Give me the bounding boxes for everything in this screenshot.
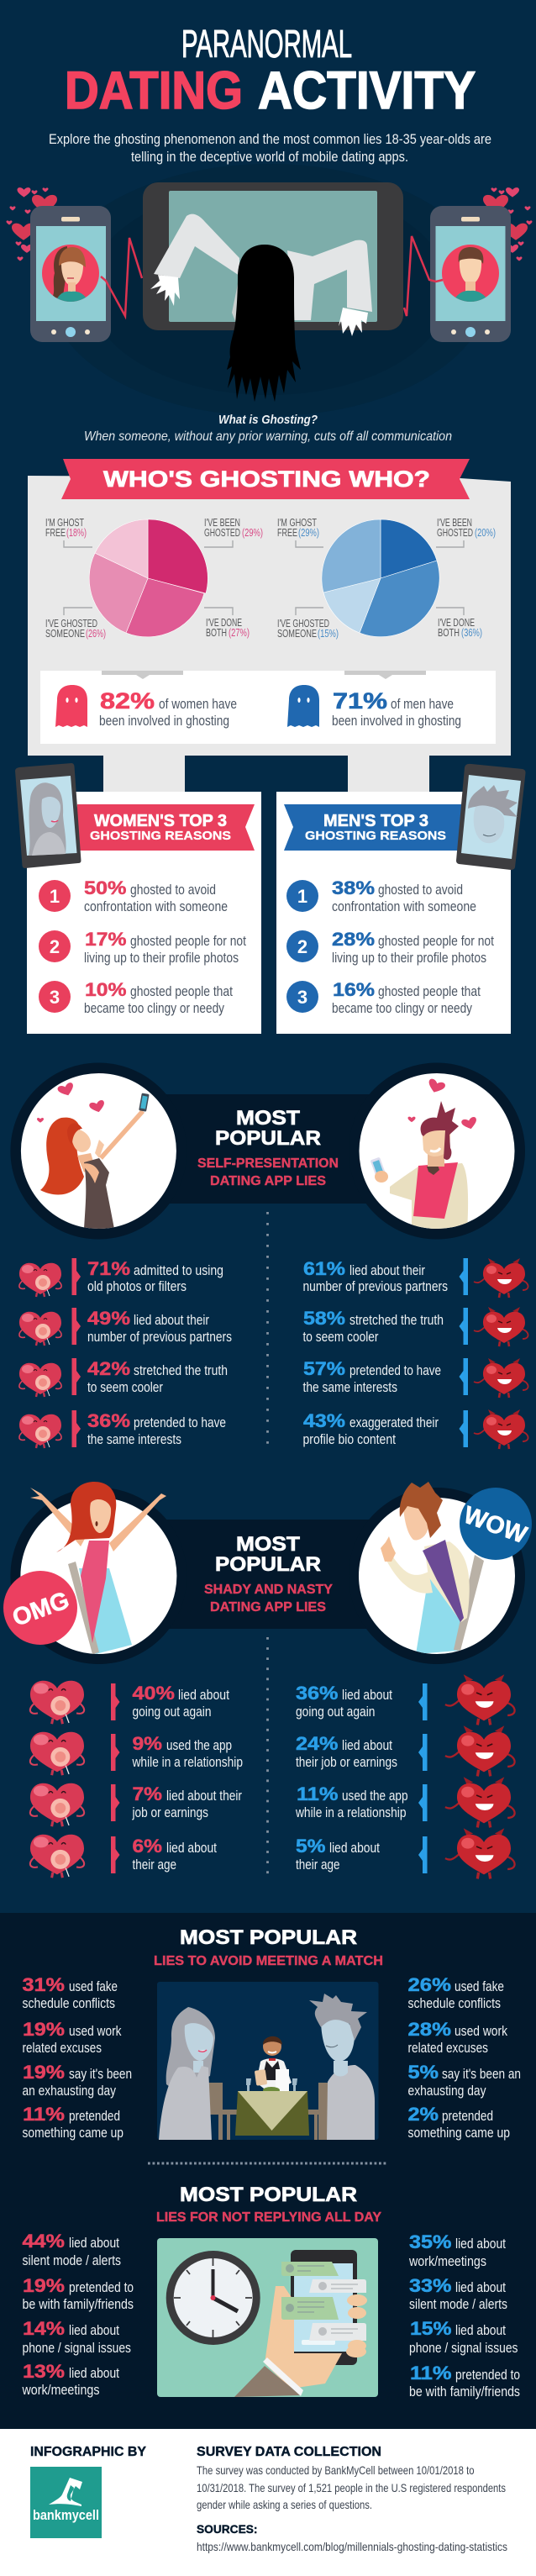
stats: men avoid meeting: used fake (455, 1978, 504, 1994)
reason 2 women: 2 (50, 936, 60, 957)
stat row: women 7%: 7% (133, 1783, 162, 1804)
stats: women not replying: 14% (23, 2318, 65, 2339)
stat row: men 11% (295, 1777, 515, 1827)
stat row: women 36% (19, 1410, 226, 1448)
pie labels: women: (29%) (242, 527, 263, 539)
ghost hair (227, 245, 301, 402)
dotted divider 2 (266, 1637, 269, 1876)
what is ghosting definition (84, 413, 452, 444)
stats: women avoid meeting: 31% (22, 1974, 65, 1995)
stats: men avoid meeting: exhausting day (408, 2083, 486, 2099)
stat row: men 43%: exaggerated their (349, 1414, 439, 1430)
stat: 82% of women: been involved in ghosting (99, 713, 229, 729)
stats: men avoid meeting (408, 1974, 521, 2141)
stat row: men 24%: lied about (342, 1737, 392, 1753)
stat row: women 36%: the same interests (87, 1431, 181, 1447)
ribbon: men's reasons: GHOSTING REASONS (305, 830, 446, 843)
stats: women not replying: be with family/friends (22, 2296, 134, 2312)
callout box (40, 671, 496, 744)
reason 1 women: 1 (50, 886, 60, 907)
pie labels: men: (36%) (461, 627, 482, 639)
stat: 82% of women: of women have (159, 696, 237, 712)
stat row: women 7% (30, 1783, 242, 1826)
banner: shady and nasty lies (3, 1482, 532, 1664)
pie labels: men: I'VE BEEN (437, 517, 472, 529)
panel: who's ghosting who (28, 459, 511, 792)
title: DATING (65, 61, 243, 120)
stats: women not replying: 19% (23, 2275, 65, 2296)
chairs (208, 2083, 328, 2140)
dotted divider 1 (266, 1212, 269, 1448)
stat row: men 61%: 61% (303, 1258, 345, 1279)
reason 2 men: 28% (332, 929, 375, 950)
pie labels: women: FREE (45, 527, 66, 539)
reason 3 men: 16% (333, 979, 375, 1000)
reason 2 men: ghosted people for not (378, 933, 494, 949)
stat row: women 71%: old photos or filters (87, 1278, 187, 1294)
banner heading: POPULAR (215, 1127, 321, 1150)
reason 1 women: confrontation with someone (84, 898, 228, 914)
stat row: women 6%: their age (133, 1857, 176, 1873)
stats: men not replying (408, 2231, 520, 2400)
ghost man (309, 1994, 375, 2140)
stats: women avoid meeting: schedule conflicts (22, 1995, 115, 2011)
stat row: women 42%: 42% (87, 1358, 130, 1379)
stats: men not replying: 15% (410, 2318, 452, 2339)
panel: women's top 3 (15, 763, 261, 1034)
pie labels: men: I'VE GHOSTED (277, 618, 329, 630)
stat row: men 36%: going out again (296, 1704, 375, 1720)
ghost arms (154, 214, 372, 320)
stat row: women 7%: job or earnings (132, 1804, 208, 1820)
dotted divider 3 (148, 2162, 387, 2165)
stat row: women 49%: lied about their (134, 1312, 209, 1328)
stats: women avoid meeting: related excuses (22, 2040, 102, 2056)
sources (197, 2523, 507, 2553)
reason 3 women: 10% (85, 979, 126, 1000)
stats: women avoid meeting: 19% (23, 2062, 65, 2083)
pie labels: men: (15%) (318, 628, 339, 640)
stat row: women 49%: 49% (87, 1308, 130, 1329)
hand (265, 2286, 342, 2389)
reason 3 men: ghosted people that (378, 983, 481, 999)
infographic by heading: INFOGRAPHIC BY (30, 2445, 147, 2459)
icon: blue ghost (287, 685, 319, 727)
stat row: women 40%: 40% (133, 1683, 175, 1704)
stat row: men 43%: 43% (303, 1410, 345, 1431)
stat row: women 49%: number of previous partners (87, 1329, 232, 1345)
stat row: men 43% (302, 1409, 528, 1449)
pie labels: men: (29%) (298, 527, 319, 539)
reason 3 women: ghosted people that (130, 983, 233, 999)
logo: bankmycell (30, 2467, 102, 2538)
pie labels: women: I'M GHOST (45, 517, 84, 529)
title: PARANORMAL (181, 22, 352, 66)
pie labels: men: I'VE DONE (438, 617, 475, 629)
pie labels: men: FREE (277, 527, 297, 539)
stat row: men 58% (302, 1307, 528, 1346)
pie labels: women: I'VE BEEN (204, 517, 240, 529)
stat row: women 9%: while in a relationship (132, 1754, 243, 1770)
stat row: men 5% (296, 1828, 515, 1878)
stats: men not replying: lied about (455, 2236, 506, 2252)
ribbon: women's reasons: WOMEN'S TOP 3 (94, 812, 227, 830)
reason 1 men: 38% (332, 877, 375, 898)
ribbon: men's reasons (284, 804, 465, 851)
pie labels: women: (18%) (66, 527, 87, 539)
ribbon: women's reasons (77, 804, 255, 851)
stat row: women 6%: lied about (166, 1840, 217, 1856)
stats: women avoid meeting: something came up (22, 2125, 123, 2141)
stat row: men 58%: to seem cooler (302, 1329, 379, 1345)
heading: lies for not replying: LIES FOR NOT REPLYING ALL DAY (156, 2210, 382, 2225)
stat row: women 7%: lied about their (166, 1788, 242, 1804)
sources: SOURCES: (197, 2523, 257, 2536)
heading ribbon (61, 459, 470, 499)
stats: women not replying: phone / signal issues (22, 2340, 131, 2356)
stat: 71% of men: of men have (391, 696, 454, 712)
stats: women avoid meeting: used fake (69, 1978, 118, 1994)
reason 3 men: became too clingy or needy (332, 1000, 472, 1016)
reason 2 women: living up to their profile photos (84, 950, 239, 966)
pie labels: women: (26%) (86, 628, 106, 640)
ribbon: men's reasons: MEN'S TOP 3 (323, 812, 428, 830)
stat row: women 40%: going out again (133, 1704, 212, 1720)
banner heading: MOST (236, 1533, 300, 1556)
stat row: men 61%: lied about their (349, 1262, 425, 1278)
stats: women avoid meeting: 11% (23, 2104, 65, 2125)
survey data collection: SURVEY DATA COLLECTION (197, 2445, 381, 2459)
banner: self-presentation lies (10, 1062, 525, 1239)
stat row: men 57%: pretended to have (349, 1362, 441, 1378)
reason 1 women (39, 877, 228, 914)
pie chart: men (322, 519, 439, 637)
stats: men avoid meeting: 28% (408, 2019, 451, 2040)
banner heading: DATING APP LIES (210, 1174, 326, 1188)
banner heading: SHADY AND NASTY (204, 1583, 334, 1597)
stat row: women 71%: admitted to using (134, 1262, 223, 1278)
intro text: telling in the deceptive world of mobile dating apps. (131, 149, 408, 165)
pie labels: women: I'VE GHOSTED (45, 618, 97, 630)
connectors to cards (103, 756, 429, 792)
phone (291, 2250, 357, 2365)
stat row: women 40%: lied about (178, 1687, 229, 1703)
stat row: women 6%: 6% (133, 1836, 162, 1857)
stat row: men 61% (302, 1258, 528, 1298)
stats: women avoid meeting: an exhausting day (22, 2083, 116, 2099)
stats: women avoid meeting: used work (69, 2023, 122, 2039)
stat row: men 5%: lied about (329, 1840, 380, 1856)
pie chart: women (89, 519, 208, 637)
stat: 71% of men: 71% (333, 688, 387, 714)
stat row: women 71% (19, 1258, 223, 1297)
stats: men avoid meeting: schedule conflicts (408, 1995, 501, 2011)
stat row: men 58%: 58% (303, 1308, 345, 1329)
stat row: women 42%: to seem cooler (87, 1379, 163, 1395)
sleeve (234, 2366, 301, 2397)
stat row: men 61%: number of previous partners (302, 1278, 448, 1294)
ghost hands (150, 275, 180, 306)
reason 1 women: ghosted to avoid (130, 882, 216, 898)
stats: women not replying: 13% (23, 2361, 65, 2382)
heading: lies to avoid meeting (154, 1926, 383, 1968)
table (235, 2091, 309, 2136)
stats: women not replying: lied about (69, 2322, 119, 2338)
stat row: women 36%: 36% (87, 1410, 130, 1431)
stats: men not replying: lied about (455, 2279, 506, 2295)
stats: women not replying: 44% (22, 2231, 65, 2252)
pie labels: men: I'M GHOST (277, 517, 317, 529)
stats: women avoid meeting: pretended (69, 2108, 120, 2124)
stats: men avoid meeting: 5% (408, 2062, 439, 2083)
ECG lines (101, 238, 142, 316)
badge: OMG (3, 1571, 77, 1645)
reason 1 men (286, 877, 476, 914)
stats: men avoid meeting: pretended (442, 2108, 493, 2124)
waiter (246, 2036, 297, 2094)
reason 1 men: ghosted to avoid (378, 882, 463, 898)
tablet (143, 182, 403, 330)
stat row: women 49% (19, 1308, 232, 1346)
ghost woman (159, 2007, 215, 2140)
stats: men avoid meeting: related excuses (408, 2040, 488, 2056)
banner heading: SELF-PRESENTATION (197, 1156, 339, 1171)
reason 1 men: confrontation with someone (332, 898, 476, 914)
stat: 71% of men: been involved in ghosting (332, 713, 461, 729)
hero illustration: ghost crawling out of tablet (7, 182, 533, 402)
right phone with man (430, 206, 511, 342)
heading: lies for not replying: MOST POPULAR (180, 2184, 357, 2206)
stats: women not replying: work/meetings (22, 2382, 99, 2398)
dark section background (0, 1913, 536, 2429)
stat row: women 9% (30, 1732, 243, 1775)
stat row: men 24% (296, 1725, 515, 1776)
stats: women not replying: silent mode / alerts (22, 2252, 121, 2268)
stat row: women 71%: 71% (87, 1258, 130, 1279)
stat row: men 36%: lied about (342, 1687, 392, 1703)
icon: phone with ghost man (456, 764, 526, 870)
icon: phone with ghost woman (15, 763, 81, 868)
banner heading: DATING APP LIES (210, 1600, 326, 1615)
illustration: woman taking selfie (37, 1082, 150, 1229)
stats: men avoid meeting: 26% (408, 1974, 451, 1995)
stats: men not replying: 35% (409, 2231, 452, 2252)
stat row: women 9%: 9% (133, 1733, 162, 1754)
pie labels: women: (27%) (229, 627, 250, 639)
pie labels: men: SOMEONE (277, 628, 317, 640)
reason 3 women: 3 (50, 987, 60, 1008)
intro text (49, 131, 491, 165)
badge: WOW: WOW (460, 1502, 531, 1549)
reason 1 men: 1 (297, 886, 307, 907)
stat row: men 5%: 5% (296, 1836, 326, 1857)
banner heading: MOST (236, 1107, 300, 1130)
banner heading (204, 1533, 334, 1615)
stat row: men 11%: while in a relationship (295, 1804, 407, 1820)
stat row: men 57% (302, 1358, 528, 1398)
stats: men avoid meeting: something came up (408, 2125, 510, 2141)
stat row: men 5%: their age (296, 1857, 339, 1873)
pie labels: women: SOMEONE (45, 628, 85, 640)
stats: men avoid meeting: used work (455, 2023, 507, 2039)
stat row: men 36%: 36% (296, 1683, 338, 1704)
fingers (346, 2294, 367, 2357)
hero glow behind illustration (49, 164, 489, 416)
reason 3 men (286, 979, 481, 1016)
icon: left hearts (7, 187, 57, 261)
stat row: men 58%: stretched the truth (349, 1312, 444, 1328)
stats: women not replying: lied about (69, 2365, 119, 2381)
stats: women not replying: pretended to (69, 2279, 134, 2295)
stat: 82% of women: 82% (100, 688, 155, 714)
stat row: women 6% (30, 1835, 217, 1878)
reason 2 men: living up to their profile photos (332, 950, 486, 966)
reason 2 men: 2 (297, 936, 307, 957)
stats: men not replying: work/meetings (408, 2253, 486, 2269)
stat row: women 40% (30, 1681, 229, 1724)
stat row: men 11%: used the app (342, 1788, 408, 1804)
stat row: men 24%: their job or earnings (296, 1754, 397, 1770)
reason 3 men: 3 (297, 987, 307, 1008)
banner heading (197, 1107, 339, 1188)
heading: lies for not replying (156, 2184, 382, 2225)
icon: right hearts (483, 187, 533, 261)
stat: 82% of women (99, 688, 237, 729)
ribbon: women's reasons: GHOSTING REASONS (90, 830, 231, 843)
pie labels: men (277, 517, 496, 640)
stat row: men 43%: profile bio content (302, 1431, 396, 1447)
pie labels: women: I'VE DONE (206, 617, 242, 629)
stat row: women 36%: pretended to have (134, 1414, 226, 1430)
pie labels: men: BOTH (438, 627, 460, 639)
stats: women avoid meeting: 19% (23, 2019, 65, 2040)
reason 2 women: 17% (85, 929, 126, 950)
stats: men not replying: lied about (455, 2322, 506, 2338)
illustration: shocked woman on phone (30, 1482, 166, 1654)
banner heading: POPULAR (215, 1553, 321, 1576)
logo: bankmycell: bankmycell (33, 2507, 99, 2523)
panel: men's top 3 (276, 764, 526, 1034)
illustration: clock and phone in hand (157, 2238, 378, 2397)
what is ghosting definition: What is Ghosting? (218, 413, 318, 427)
stats: men avoid meeting: 2% (408, 2104, 439, 2125)
stats: women avoid meeting (22, 1974, 132, 2141)
reason 3 women (39, 979, 233, 1016)
stats: women not replying: lied about (69, 2235, 119, 2251)
survey data collection (197, 2445, 506, 2511)
reason 2 women (39, 929, 246, 966)
icon: red ghost (55, 685, 87, 727)
chat bubbles (281, 2262, 366, 2341)
stats: men not replying: 33% (409, 2275, 452, 2296)
stats: women not replying (22, 2231, 134, 2398)
badge: WOW (460, 1488, 532, 1560)
pie labels: women (45, 517, 263, 640)
reason 1 women: 50% (84, 877, 126, 898)
reason 3 women: became too clingy or needy (84, 1000, 224, 1016)
stats: women avoid meeting: say it's been (69, 2066, 132, 2082)
stat row: women 42% (19, 1358, 228, 1397)
title (65, 22, 476, 120)
stat row: men 11%: 11% (297, 1783, 338, 1804)
illustration: shocked man on phone (381, 1482, 484, 1654)
stat row: men 57%: 57% (303, 1358, 345, 1379)
survey data collection: The survey was conducted by BankMyCell between 10/01/2018 to (197, 2463, 475, 2477)
stats: men not replying: silent mode / alerts (409, 2296, 507, 2312)
stat row: men 24%: 24% (296, 1733, 338, 1754)
pie labels: men: GHOSTED (437, 527, 473, 539)
heading: lies to avoid meeting: MOST POPULAR (180, 1926, 357, 1949)
stat row: women 9%: used the app (166, 1737, 232, 1753)
stat row: women 42%: stretched the truth (134, 1362, 228, 1378)
pie labels: men: (20%) (475, 527, 496, 539)
heading: lies to avoid meeting: LIES TO AVOID MEETING A MATCH (154, 1954, 383, 1968)
pie labels: women: GHOSTED (204, 527, 240, 539)
pie labels: women: BOTH (206, 627, 227, 639)
heading ribbon: WHO'S GHOSTING WHO? (103, 466, 430, 492)
title: ACTIVITY (258, 61, 476, 120)
left phone with woman (30, 206, 111, 342)
reason 2 men (286, 929, 494, 966)
footer (0, 2429, 536, 2576)
clock (166, 2251, 260, 2345)
what is ghosting definition: When someone, without any prior warning, cuts off all communication (84, 429, 452, 444)
stat: 71% of men (332, 688, 461, 729)
stats: men not replying: pretended to (455, 2367, 520, 2383)
survey data collection: gender while asking a series of questions. (197, 2498, 372, 2511)
stat row: men 36% (296, 1674, 515, 1725)
illustration: man with phone (370, 1078, 478, 1231)
stats: men not replying: 11% (410, 2363, 452, 2384)
stat row: men 57%: the same interests (302, 1379, 397, 1395)
reason 2 women: ghosted people for not (130, 933, 246, 949)
badge: OMG: OMG (9, 1587, 73, 1632)
illustration: ghost couple at dinner (157, 1982, 378, 2140)
